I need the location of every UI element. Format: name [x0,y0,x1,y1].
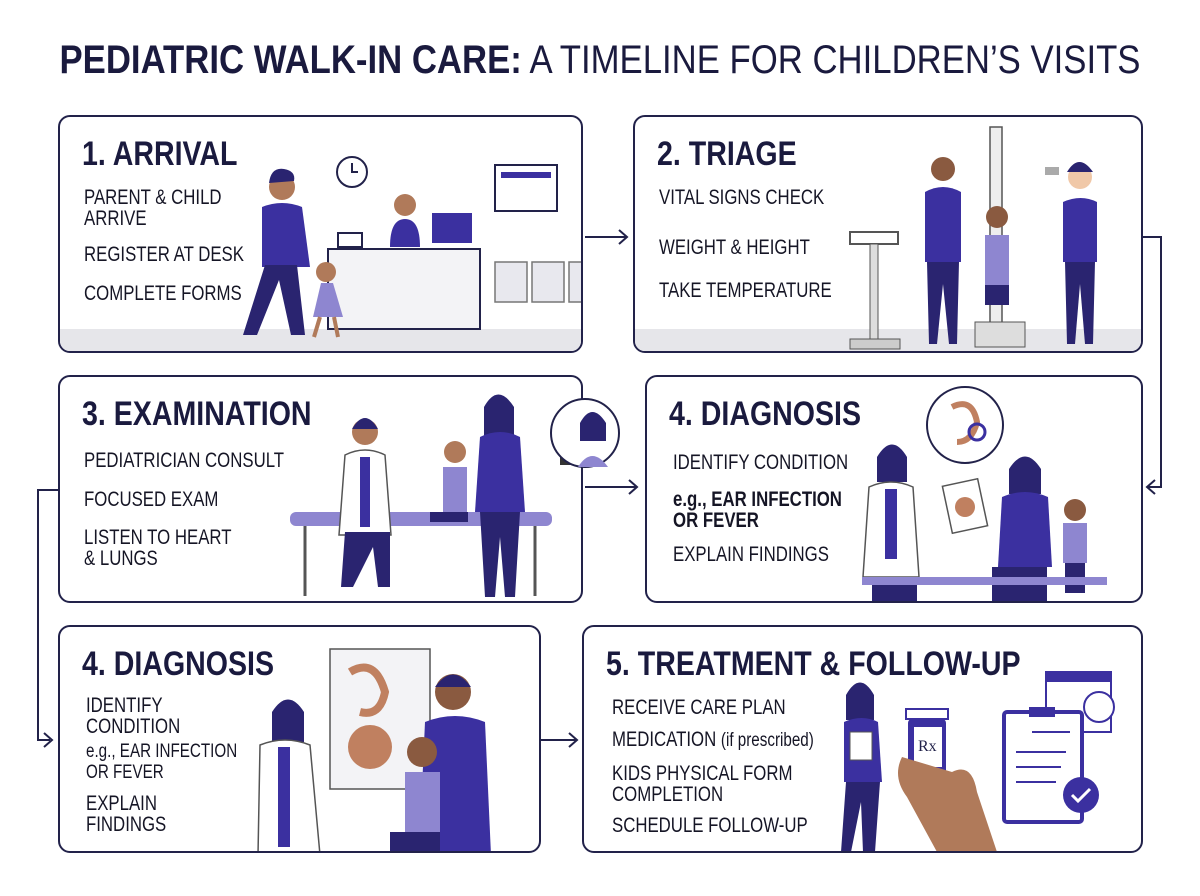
panel: 3 examination [58,375,583,603]
text: triage steps: VITAL SIGNS CHECK [659,186,824,209]
illustration: treatment scene [841,671,1115,851]
text: diagnosis steps: EXPLAIN FINDINGS [673,543,829,566]
text: diagnosis repeat steps: FINDINGS [86,813,166,836]
text: diagnosis steps: IDENTIFY CONDITION [673,451,848,474]
heading: treatment: 5. TREATMENT & FOLLOW-UP [606,645,1021,683]
illustration: treatment scene: Rx [918,738,937,755]
text: diagnosis repeat steps [86,694,237,836]
text: examination steps [84,449,284,570]
panel: 2 triage [633,115,1143,353]
text: arrival steps [84,186,244,305]
text: examination steps: & LUNGS [84,547,158,570]
text: arrival steps: ARRIVE [84,207,147,230]
text: triage steps [659,186,832,302]
text: examination steps: LISTEN TO HEART [84,526,232,549]
illustration: diagnosis repeat scene [257,648,491,851]
heading: arrival: 1. ARRIVAL [82,135,238,173]
text: diagnosis repeat steps: CONDITION [86,715,180,738]
text: treatment steps: KIDS PHYSICAL FORM [612,762,792,785]
text: arrival steps: PARENT & CHILD [84,186,222,209]
panel: 5 treatment [582,625,1143,853]
text: diagnosis steps: e.g., EAR INFECTION [673,488,842,511]
illustration: diagnosis scene [862,386,1107,601]
text: triage steps: TAKE TEMPERATURE [659,279,832,302]
panel: 4 diagnosis (right) [645,375,1143,603]
text: treatment steps [612,696,814,837]
illustration: examination scene [290,394,570,597]
illustration: triage scene [849,126,1097,350]
text: examination steps: FOCUSED EXAM [84,488,218,511]
heading: examination: 3. EXAMINATION [82,395,312,433]
icon: otoscope patient bubble [550,398,620,468]
text: arrival steps: COMPLETE FORMS [84,282,242,305]
text: treatment steps: COMPLETION [612,783,723,806]
text: diagnosis repeat steps: OR FEVER [86,762,164,783]
text: diagnosis steps: OR FEVER [673,509,759,532]
text: diagnosis repeat steps: IDENTIFY [86,694,163,717]
text: treatment steps: MEDICATION (if prescribed) [612,728,814,751]
text: diagnosis steps [673,451,848,566]
text: treatment steps: SCHEDULE FOLLOW-UP [612,814,808,837]
panel: 4 diagnosis (bottom left) [58,625,541,853]
text: treatment steps: RECEIVE CARE PLAN [612,696,786,719]
heading: triage: 2. TRIAGE [657,135,797,173]
text: diagnosis repeat steps: EXPLAIN [86,792,157,815]
illustration: arrival scene [243,156,581,338]
text: diagnosis repeat steps: e.g., EAR INFECTION [86,741,237,762]
heading: diagnosis: 4. DIAGNOSIS [669,395,861,433]
panel: 1 arrival [58,115,583,353]
title: PEDIATRIC WALK-IN CARE: A TIMELINE FOR CHILDREN’S VISITS [60,38,1140,82]
heading: diagnosis repeat: 4. DIAGNOSIS [82,645,274,683]
text: examination steps: PEDIATRICIAN CONSULT [84,449,284,472]
text: arrival steps: REGISTER AT DESK [84,243,244,266]
text: triage steps: WEIGHT & HEIGHT [659,236,810,259]
